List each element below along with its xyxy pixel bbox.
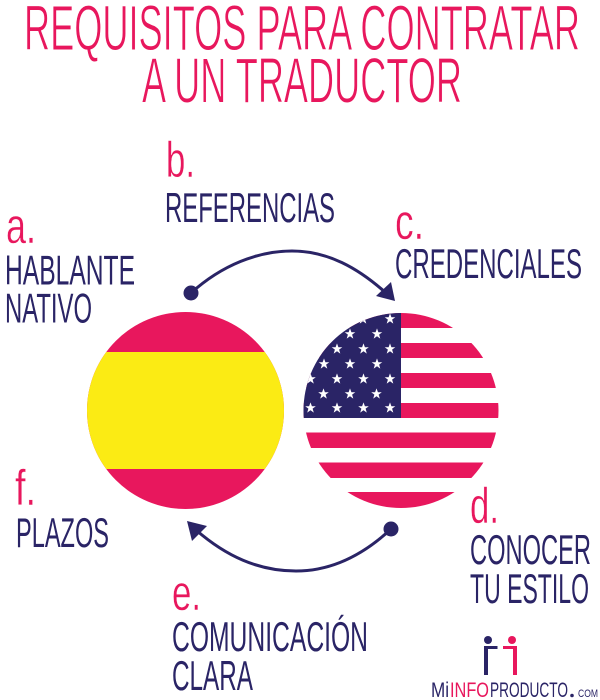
item f: plazos [15, 460, 109, 556]
icon: american flag circle [300, 310, 502, 512]
icon: logo figures [484, 636, 517, 675]
item e: comunicacion clara: e. [172, 565, 201, 621]
title [24, 0, 580, 116]
arrow: top curve from spain to usa [184, 251, 395, 301]
icon: spanish flag circle [87, 312, 284, 509]
logo: miinfoproducto.com [431, 636, 598, 700]
item d: conocer tu estilo: d. [470, 478, 499, 534]
item d: conocer tu estilo [470, 478, 591, 612]
item f: plazos: PLAZOS [16, 509, 109, 556]
arrow: bottom curve from usa to spain [187, 521, 398, 571]
item b: referencias [165, 132, 335, 231]
item b: referencias: b. [166, 132, 195, 188]
item c: credenciales: c. [395, 194, 424, 250]
item e: comunicacion clara: COMUNICACIÓN [172, 613, 368, 660]
item a: hablante nativo: HABLANTE [5, 246, 135, 294]
item e: comunicacion clara [172, 565, 368, 699]
logo wordmark [431, 679, 598, 700]
item a: hablante nativo [5, 198, 135, 332]
item f: plazos: f. [15, 460, 36, 516]
item e: comunicacion clara: CLARA [172, 652, 253, 699]
item a: hablante nativo: NATIVO [5, 284, 92, 332]
item c: credenciales [395, 194, 582, 287]
item a: hablante nativo: a. [6, 198, 36, 254]
item b: referencias: REFERENCIAS [165, 184, 335, 231]
